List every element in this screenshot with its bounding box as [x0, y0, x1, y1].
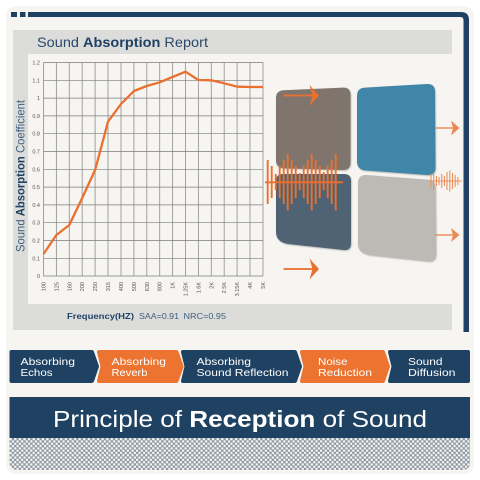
x axis labels: 800 — [158, 282, 164, 291]
x axis labels: 500 — [132, 282, 138, 291]
chevron: sound diffusion: Diffusion — [408, 367, 456, 379]
x axis labels: 1.25K — [184, 282, 190, 296]
x axis labels: 1.6K — [196, 282, 202, 293]
chevron: absorbing sound reflection: Sound Reflection — [196, 367, 289, 379]
x axis labels: 315 — [106, 282, 112, 291]
y axis labels — [32, 60, 40, 280]
arrow: outgoing top — [435, 120, 460, 136]
x axis labels: 1K — [171, 282, 177, 289]
x axis labels: 400 — [119, 282, 125, 291]
arrow: outgoing bottom — [435, 228, 460, 242]
main title: Principle of Reception of Sound — [53, 406, 427, 432]
frequency and ratings caption: SAA=0.91 — [139, 312, 180, 321]
frequency and ratings caption: Frequency(HZ) — [67, 312, 134, 321]
chart grid — [44, 62, 263, 276]
chevron: absorbing reverb: Absorbing — [112, 356, 166, 368]
y axis labels: 1.2 — [32, 60, 40, 66]
arrow: incoming bottom — [284, 258, 319, 280]
acoustic panels — [276, 84, 436, 261]
y axis labels: 1 — [37, 96, 40, 102]
panel: slate — [276, 174, 351, 250]
chevron: sound diffusion: Sound — [408, 356, 443, 368]
chevron: absorbing sound reflection: Absorbing — [196, 356, 251, 368]
frequency and ratings caption: NRC=0.95 — [184, 312, 227, 321]
x axis labels: 200 — [80, 282, 86, 291]
x axis labels: 5K — [261, 282, 267, 289]
absorption curve — [44, 72, 263, 254]
chevron: sound diffusion — [390, 352, 468, 381]
hatched footer band — [10, 438, 470, 470]
y axis labels: 1.1 — [32, 78, 40, 84]
waveform: reduced sound — [429, 170, 462, 192]
panel: brown — [276, 88, 350, 170]
chevron: absorbing reverb — [99, 352, 182, 381]
process chevrons — [12, 352, 468, 381]
x axis labels: 3.15K — [235, 282, 241, 296]
y axis labels: 0.7 — [32, 150, 40, 156]
x axis labels: 160 — [67, 282, 73, 291]
y axis labels: 0.1 — [32, 256, 40, 262]
chevron: absorbing echos — [12, 352, 97, 381]
chevron: absorbing reverb: Reverb — [112, 367, 148, 379]
chevron: absorbing echos: Absorbing — [20, 356, 75, 368]
panel: light grey — [358, 175, 436, 261]
y axis labels: 0 — [37, 274, 40, 280]
x axis labels: 2.5K — [222, 282, 228, 293]
x axis labels: 125 — [54, 282, 60, 291]
chevron: absorbing sound reflection — [183, 352, 300, 381]
x axis labels: 4K — [248, 282, 254, 289]
y axis title: Sound Absorption Coefficient — [14, 99, 28, 252]
waveform: incoming sound — [265, 154, 343, 210]
heading: report title: Sound Absorption Report — [37, 34, 208, 50]
arrow: incoming top — [284, 85, 319, 106]
y axis labels: 0.4 — [32, 203, 40, 209]
x axis labels: 250 — [93, 282, 99, 291]
panel: blue — [357, 84, 436, 175]
y axis labels: 0.9 — [32, 114, 40, 120]
y axis labels: 0.3 — [32, 221, 40, 227]
chevron: noise reduction: Noise — [318, 356, 348, 368]
chevron: noise reduction: Reduction — [318, 367, 372, 379]
y axis labels: 0.5 — [32, 185, 40, 191]
y axis labels: 0.2 — [32, 238, 40, 244]
x axis labels: 100 — [42, 282, 48, 291]
x axis labels: 630 — [145, 282, 151, 291]
x axis labels: 2K — [209, 282, 215, 289]
title banner — [10, 397, 470, 438]
y axis labels: 0.6 — [32, 167, 40, 173]
chevron: absorbing echos: Echos — [20, 367, 52, 379]
y axis labels: 0.8 — [32, 132, 40, 138]
x axis labels — [42, 282, 267, 296]
chevron: noise reduction — [302, 352, 388, 381]
line chart — [32, 60, 267, 296]
top navy frame — [11, 12, 469, 332]
